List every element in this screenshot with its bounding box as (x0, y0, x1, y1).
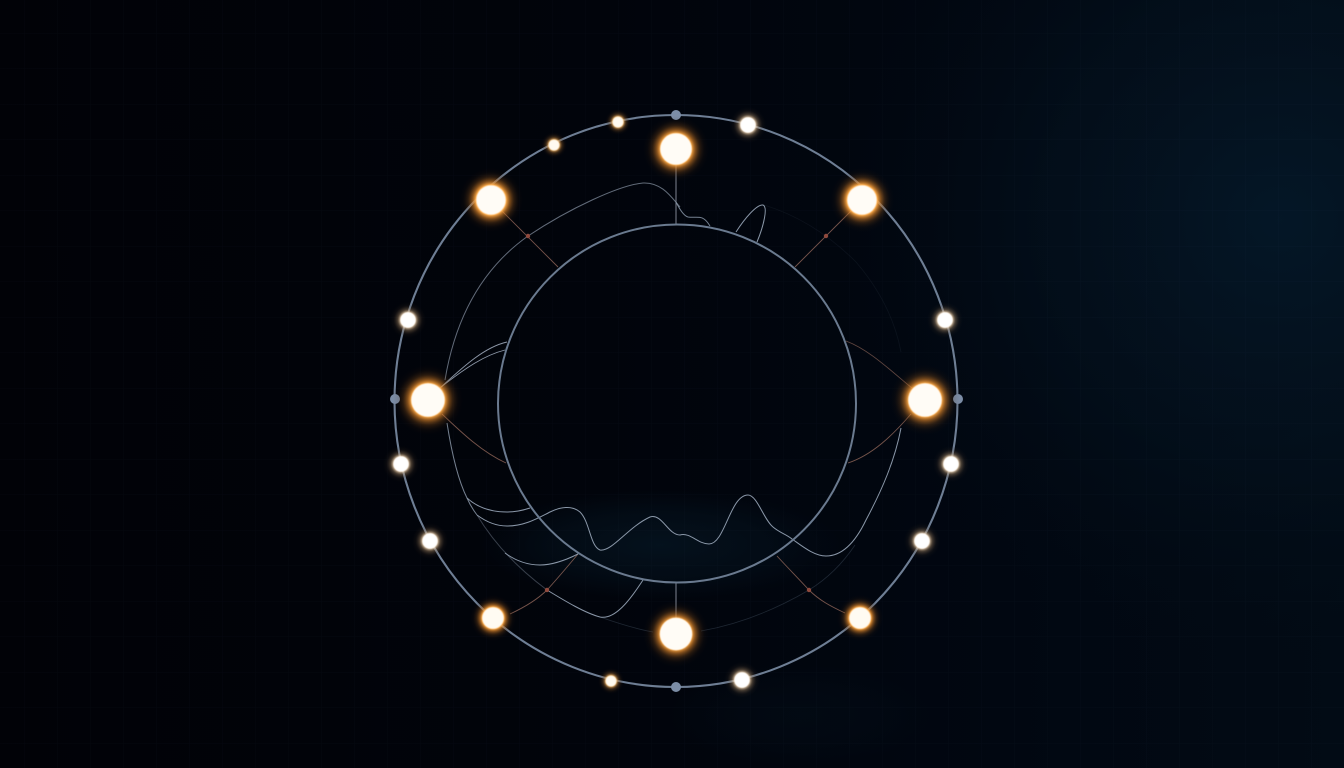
inner ring (498, 224, 856, 582)
left arm curves to the inner ring (440, 342, 507, 388)
faint middle orbit (600, 205, 901, 632)
branch one (467, 498, 530, 512)
branch three (547, 580, 643, 617)
orange connectors from nodes to inner ring (442, 211, 912, 614)
left descending trace (447, 423, 477, 515)
vertical connectors (675, 165, 677, 618)
peak above inner ring (736, 205, 765, 242)
branch two (505, 553, 578, 565)
steel anchor dots (390, 110, 963, 692)
crossing markers (526, 234, 828, 592)
large amber nodes (393, 116, 960, 667)
outer ring (394, 115, 958, 687)
top notch trace (676, 202, 710, 226)
small white nodes (383, 107, 969, 698)
upper-left trace (445, 183, 680, 380)
faint link (477, 515, 547, 590)
central wave (477, 428, 901, 556)
thin traced curves (445, 183, 901, 617)
tiny warm nodes (541, 109, 631, 694)
